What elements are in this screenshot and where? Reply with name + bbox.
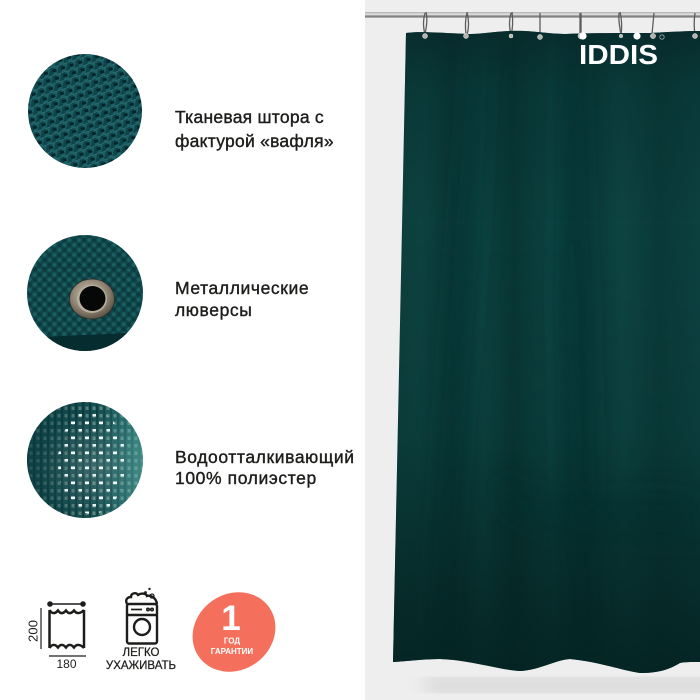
text: waffle fabric: Тканевая штора с xyxy=(175,107,324,127)
text: water-repellent polyester: 100% полиэстер xyxy=(175,468,317,488)
photo circle: waffle fabric xyxy=(28,54,142,168)
icon: size 200x180 xyxy=(41,601,86,656)
text: metal grommets xyxy=(174,278,309,320)
badge: 1 year warranty: ГОД xyxy=(224,636,240,646)
badge: 1 year warranty xyxy=(177,576,291,688)
text: water-repellent polyester xyxy=(175,447,355,488)
panel: curtain photo xyxy=(365,0,700,700)
curtain rod xyxy=(365,12,700,18)
grommets xyxy=(422,33,698,40)
logo: IDDIS: IDDIS xyxy=(579,39,658,70)
text: waffle fabric: фактурой «вафля» xyxy=(175,131,334,151)
text: waffle fabric xyxy=(175,107,334,151)
photo circle: metal grommet xyxy=(27,235,143,351)
floor shadow xyxy=(425,678,700,692)
curtain fabric xyxy=(390,25,700,680)
badge: 1 year warranty: ГАРАНТИИ xyxy=(211,647,253,656)
icon: washing machine xyxy=(126,588,157,644)
label: easy care: УХАЖИВАТЬ xyxy=(106,660,176,672)
label: easy care: ЛЕГКО xyxy=(123,647,160,659)
text: metal grommets: люверсы xyxy=(175,300,252,320)
text: water-repellent polyester: Водоотталкивающий xyxy=(175,447,355,467)
grommet ring xyxy=(70,279,114,319)
photo circle: water-repellent fabric xyxy=(27,402,143,518)
badge: 1 year warranty: 1 xyxy=(221,599,241,638)
curtain rings xyxy=(424,12,695,35)
label: 180: 180 xyxy=(56,657,77,671)
label: 200: 200 xyxy=(26,620,40,642)
text: metal grommets: Металлические xyxy=(175,278,309,298)
